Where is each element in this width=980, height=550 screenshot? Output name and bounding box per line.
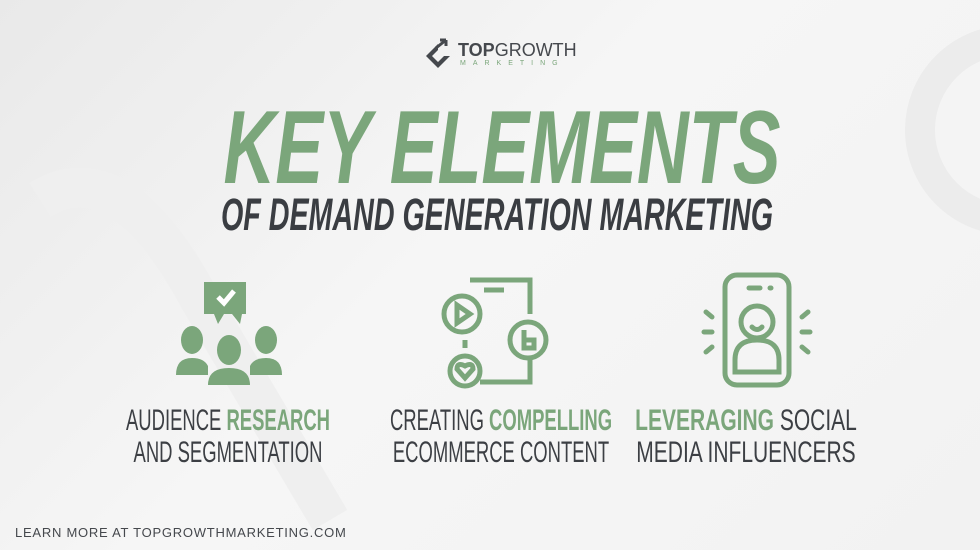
- label: influencers: MEDIA INFLUENCERS: [636, 436, 856, 469]
- footer: LEARN MORE AT TOPGROWTHMARKETING.COM: [15, 525, 347, 540]
- icon: audience: [176, 282, 282, 385]
- logo: [426, 38, 577, 68]
- label: content: ECOMMERCE CONTENT: [393, 436, 609, 469]
- label: audience: AND SEGMENTATION: [134, 436, 322, 469]
- label: audience: AUDIENCE RESEARCH: [126, 404, 330, 437]
- subtitle: OF DEMAND GENERATION MARKETING: [221, 189, 773, 240]
- icon: content: [442, 278, 548, 388]
- title: KEY ELEMENTS: [224, 90, 780, 206]
- label: influencers: [635, 404, 857, 469]
- label: audience: [126, 404, 330, 469]
- icon: logo mark: [426, 38, 450, 68]
- icon: influencer phone: [702, 272, 812, 388]
- label: influencers: LEVERAGING SOCIAL: [635, 404, 857, 437]
- logo: MARKETING: [460, 60, 565, 67]
- label: content: CREATING COMPELLING: [390, 404, 612, 437]
- label: content: [390, 404, 612, 469]
- logo text: TOPGROWTH: [458, 40, 577, 60]
